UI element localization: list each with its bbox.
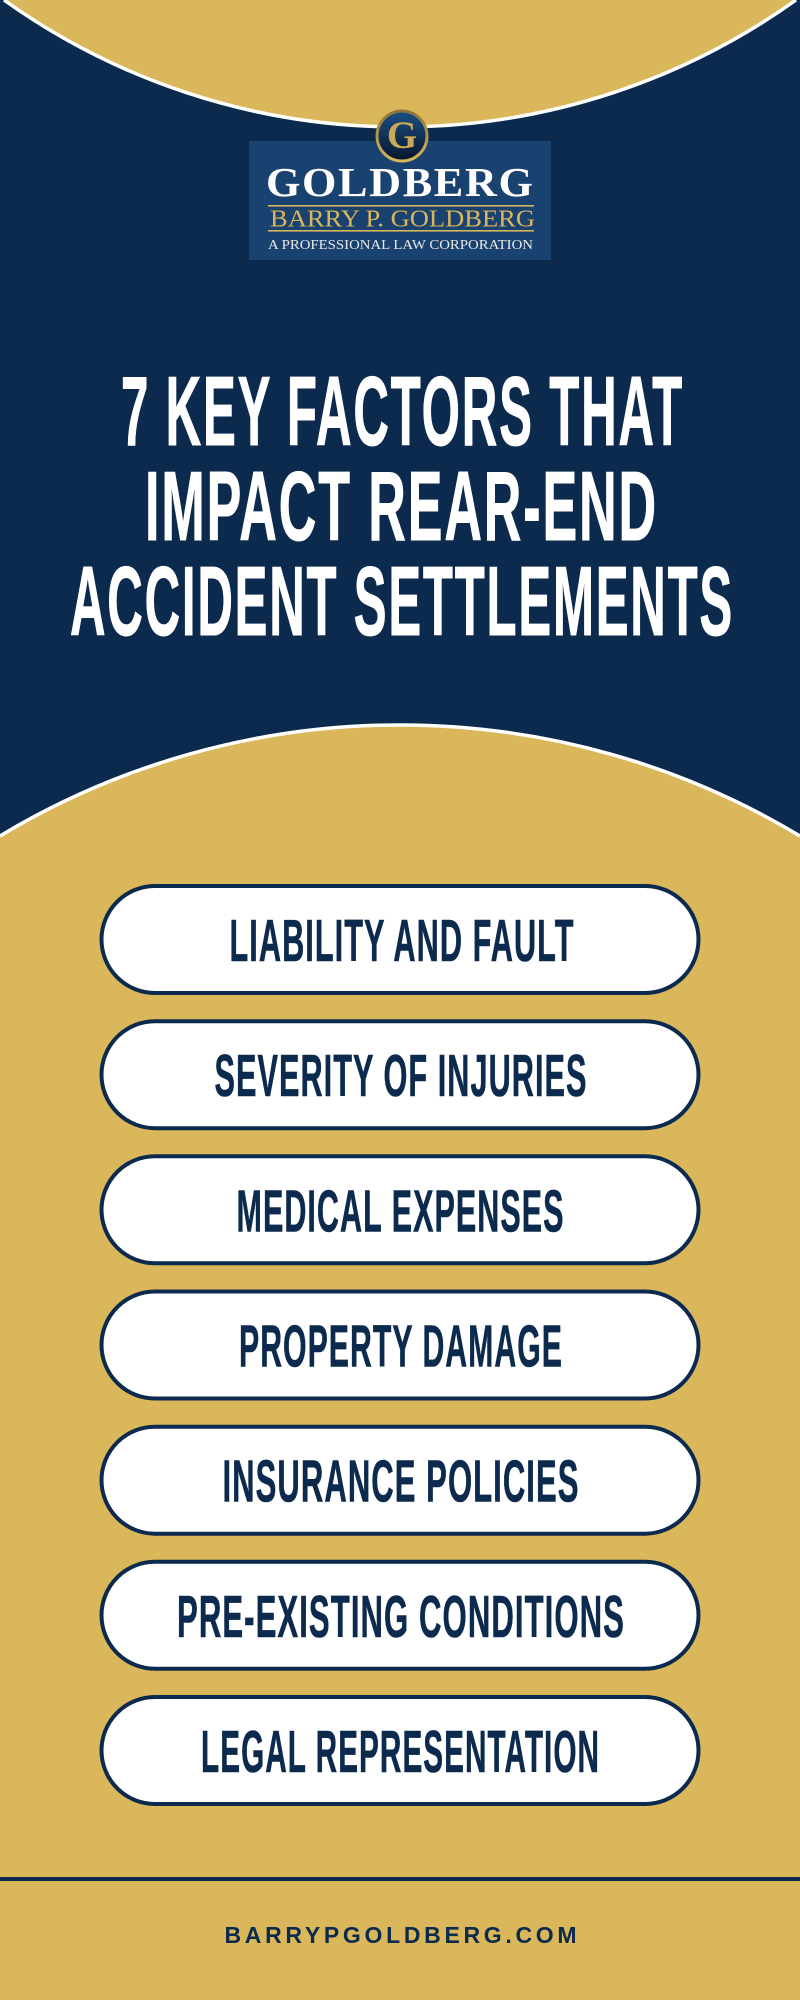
top gold arc [4, 0, 796, 127]
lower gold panel [0, 725, 800, 2000]
factor 7 pill [102, 1697, 698, 1804]
factor 6 pill [102, 1562, 698, 1669]
logo rules [268, 205, 534, 232]
logo plate [249, 141, 551, 260]
logo [249, 111, 551, 260]
footer url: BARRYPGOLDBERG.COM [224, 1922, 576, 1948]
logo tagline: A PROFESSIONAL LAW CORPORATION [268, 237, 533, 252]
factor 1 pill [102, 886, 698, 993]
factor 5 pill [102, 1427, 698, 1534]
logo seal [377, 111, 427, 161]
footer divider [0, 1877, 800, 1881]
factor 4 pill [102, 1292, 698, 1398]
title [70, 356, 734, 656]
logo name: BARRY P. GOLDBERG [270, 206, 535, 232]
logo wordmark: GOLDBERG [266, 159, 534, 205]
factor list [102, 886, 698, 1804]
factor 2 pill [102, 1021, 698, 1128]
logo seal: G [387, 114, 417, 157]
factor 3 pill [102, 1156, 698, 1263]
